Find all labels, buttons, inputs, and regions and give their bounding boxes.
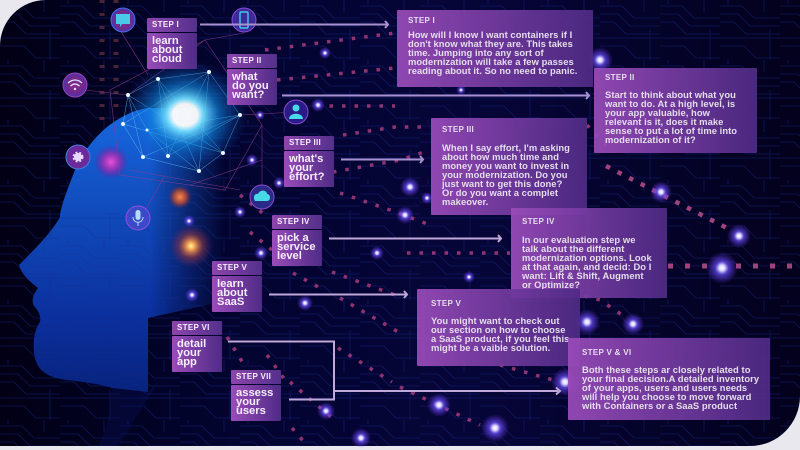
panel: step III: money you want to invest in (442, 160, 569, 170)
colored glows (94, 145, 213, 268)
panel: step II: STEP II (605, 73, 635, 82)
step VII title: your (236, 396, 260, 408)
arrow: step III (341, 156, 423, 163)
panel: step IV: STEP IV (522, 217, 555, 226)
panel: steps V and VI: of your apps, users and users needs (582, 382, 747, 392)
step VII title: users (236, 405, 266, 417)
panel: step I: don't know what they are. This takes (408, 38, 573, 48)
panel: step III: Or do you want a complet (442, 186, 558, 198)
arrow: step II (282, 92, 589, 99)
step II title: want? (232, 89, 264, 101)
panel: step I (397, 10, 593, 87)
icon: message (111, 8, 135, 32)
panel: step I: modernization will take a few passes (408, 56, 574, 66)
panel: step IV: modernization options. Look (522, 252, 652, 262)
brain glow (123, 60, 247, 170)
panel: step II: your app valuable, how (605, 106, 710, 118)
panel: step V: You might want to check out (431, 314, 560, 326)
step I title (147, 33, 197, 69)
step II title: do you (232, 80, 269, 92)
step I label: STEP I (152, 20, 179, 29)
panel: step III: about how much time and (442, 150, 559, 162)
panel: step II (594, 68, 757, 153)
neural network lines (85, 30, 296, 215)
panel: step III: makeover. (442, 196, 488, 206)
panel: step V (417, 289, 580, 366)
step II title (227, 69, 277, 105)
arrow: step I (200, 21, 388, 28)
network nodes (121, 70, 242, 173)
icon: microphone (126, 206, 150, 230)
step I title: cloud (152, 53, 182, 65)
panel: steps V and VI: your final decision.A detailed inventory (582, 372, 759, 384)
panel: step II: sense to put a lot of time into (605, 124, 737, 136)
step VII title: assess (236, 387, 273, 399)
step I title: learn (152, 35, 179, 47)
step VI label (172, 321, 222, 335)
panel: step I: time. Jumping into any sort of (408, 46, 544, 58)
brown via dots (102, 0, 116, 120)
step III title: your (289, 162, 313, 174)
panel: step II: relevant is it, does it make (605, 116, 723, 126)
step VII title (231, 385, 281, 421)
head silhouette (19, 108, 230, 392)
panel: step IV: talk about the different (522, 242, 624, 254)
step V title: learn (217, 278, 244, 290)
panel: steps V and VI: Both these steps ar closely related to (582, 364, 750, 374)
panel: step V: a SaaS product, if you feel this (431, 332, 569, 344)
icon: cloud (250, 185, 274, 209)
step II title: what (232, 71, 257, 83)
panel: step III: just want to get this done? (442, 178, 562, 188)
panel: step III (431, 118, 587, 215)
panel: step II: modernization of it? (605, 134, 696, 144)
panel: step V: our section on how to choose (431, 324, 566, 334)
step VI title: your (177, 347, 201, 359)
panel: step IV: at that again, and decid: Do I (522, 260, 651, 272)
panel: step III: your modernization. Do you (442, 168, 568, 180)
panel: steps V and VI: with Containers or a SaaS product (582, 400, 737, 410)
step V title: about (217, 287, 247, 299)
panel: step II: Start to think about what you (605, 88, 736, 100)
step V title (212, 276, 262, 312)
step II label (227, 54, 277, 68)
step V label: STEP V (217, 263, 247, 272)
arrow: step IV (329, 235, 501, 242)
large pink dotted row (668, 264, 795, 268)
step V label (212, 261, 262, 275)
panel: step IV: or Optimize? (522, 278, 580, 290)
panel: step I: STEP I (408, 16, 435, 25)
pink dotted circuit lines (227, 33, 625, 443)
step VI title (172, 336, 222, 372)
arrow: step V (269, 291, 407, 298)
step V title: SaaS (217, 296, 244, 308)
step I label (147, 18, 197, 32)
panel: step I: How will I know I want containers if I (408, 28, 572, 40)
panel: step IV: want: Lift & Shift, Augment (522, 270, 644, 280)
step III title: effort? (289, 171, 324, 183)
neck (67, 380, 160, 446)
step VI label: STEP VI (177, 323, 210, 332)
icon: person (284, 100, 308, 124)
step I title: about (152, 44, 182, 56)
step III label: STEP III (289, 138, 321, 147)
panel: step II: want to do. At a high level, is (605, 98, 735, 108)
step VII label: STEP VII (236, 372, 271, 381)
icon: wifi (63, 73, 87, 97)
panel: step V: might be a vaible solution. (431, 342, 550, 352)
step IV title: pick a (277, 232, 309, 244)
panel: step I: reading about it. So no need to panic. (408, 64, 577, 76)
icon: gear (66, 145, 90, 169)
icon: phone (232, 8, 256, 32)
step III label (284, 136, 334, 150)
panel: step IV: In our evaluation step we (522, 234, 636, 244)
step IV title (272, 230, 322, 266)
large pink dotted lines (606, 166, 727, 228)
panel: step III: STEP III (442, 125, 474, 134)
panel: step IV (511, 208, 667, 298)
glowing lights (183, 47, 751, 448)
panel: steps V and VI: will help you choose to move forward (582, 390, 751, 402)
step III title: what's (289, 153, 323, 165)
panel: steps V and VI (568, 338, 770, 420)
step IV title: level (277, 250, 302, 262)
step III title (284, 151, 334, 187)
arrow: steps VI and VII (228, 342, 560, 400)
step VI title: detail (177, 338, 206, 350)
step II label: STEP II (232, 56, 262, 65)
step IV title: service (277, 241, 316, 253)
neural network (123, 72, 240, 171)
step VII label (231, 370, 281, 384)
step IV label: STEP IV (277, 217, 310, 226)
step IV label (272, 215, 322, 229)
panel: steps V and VI: STEP V & VI (582, 348, 631, 357)
panel: step III: When I say effort, I'm asking (442, 142, 570, 152)
panel: step V: STEP V (431, 299, 461, 308)
head circuit texture (19, 210, 150, 392)
step VI title: app (177, 356, 197, 368)
